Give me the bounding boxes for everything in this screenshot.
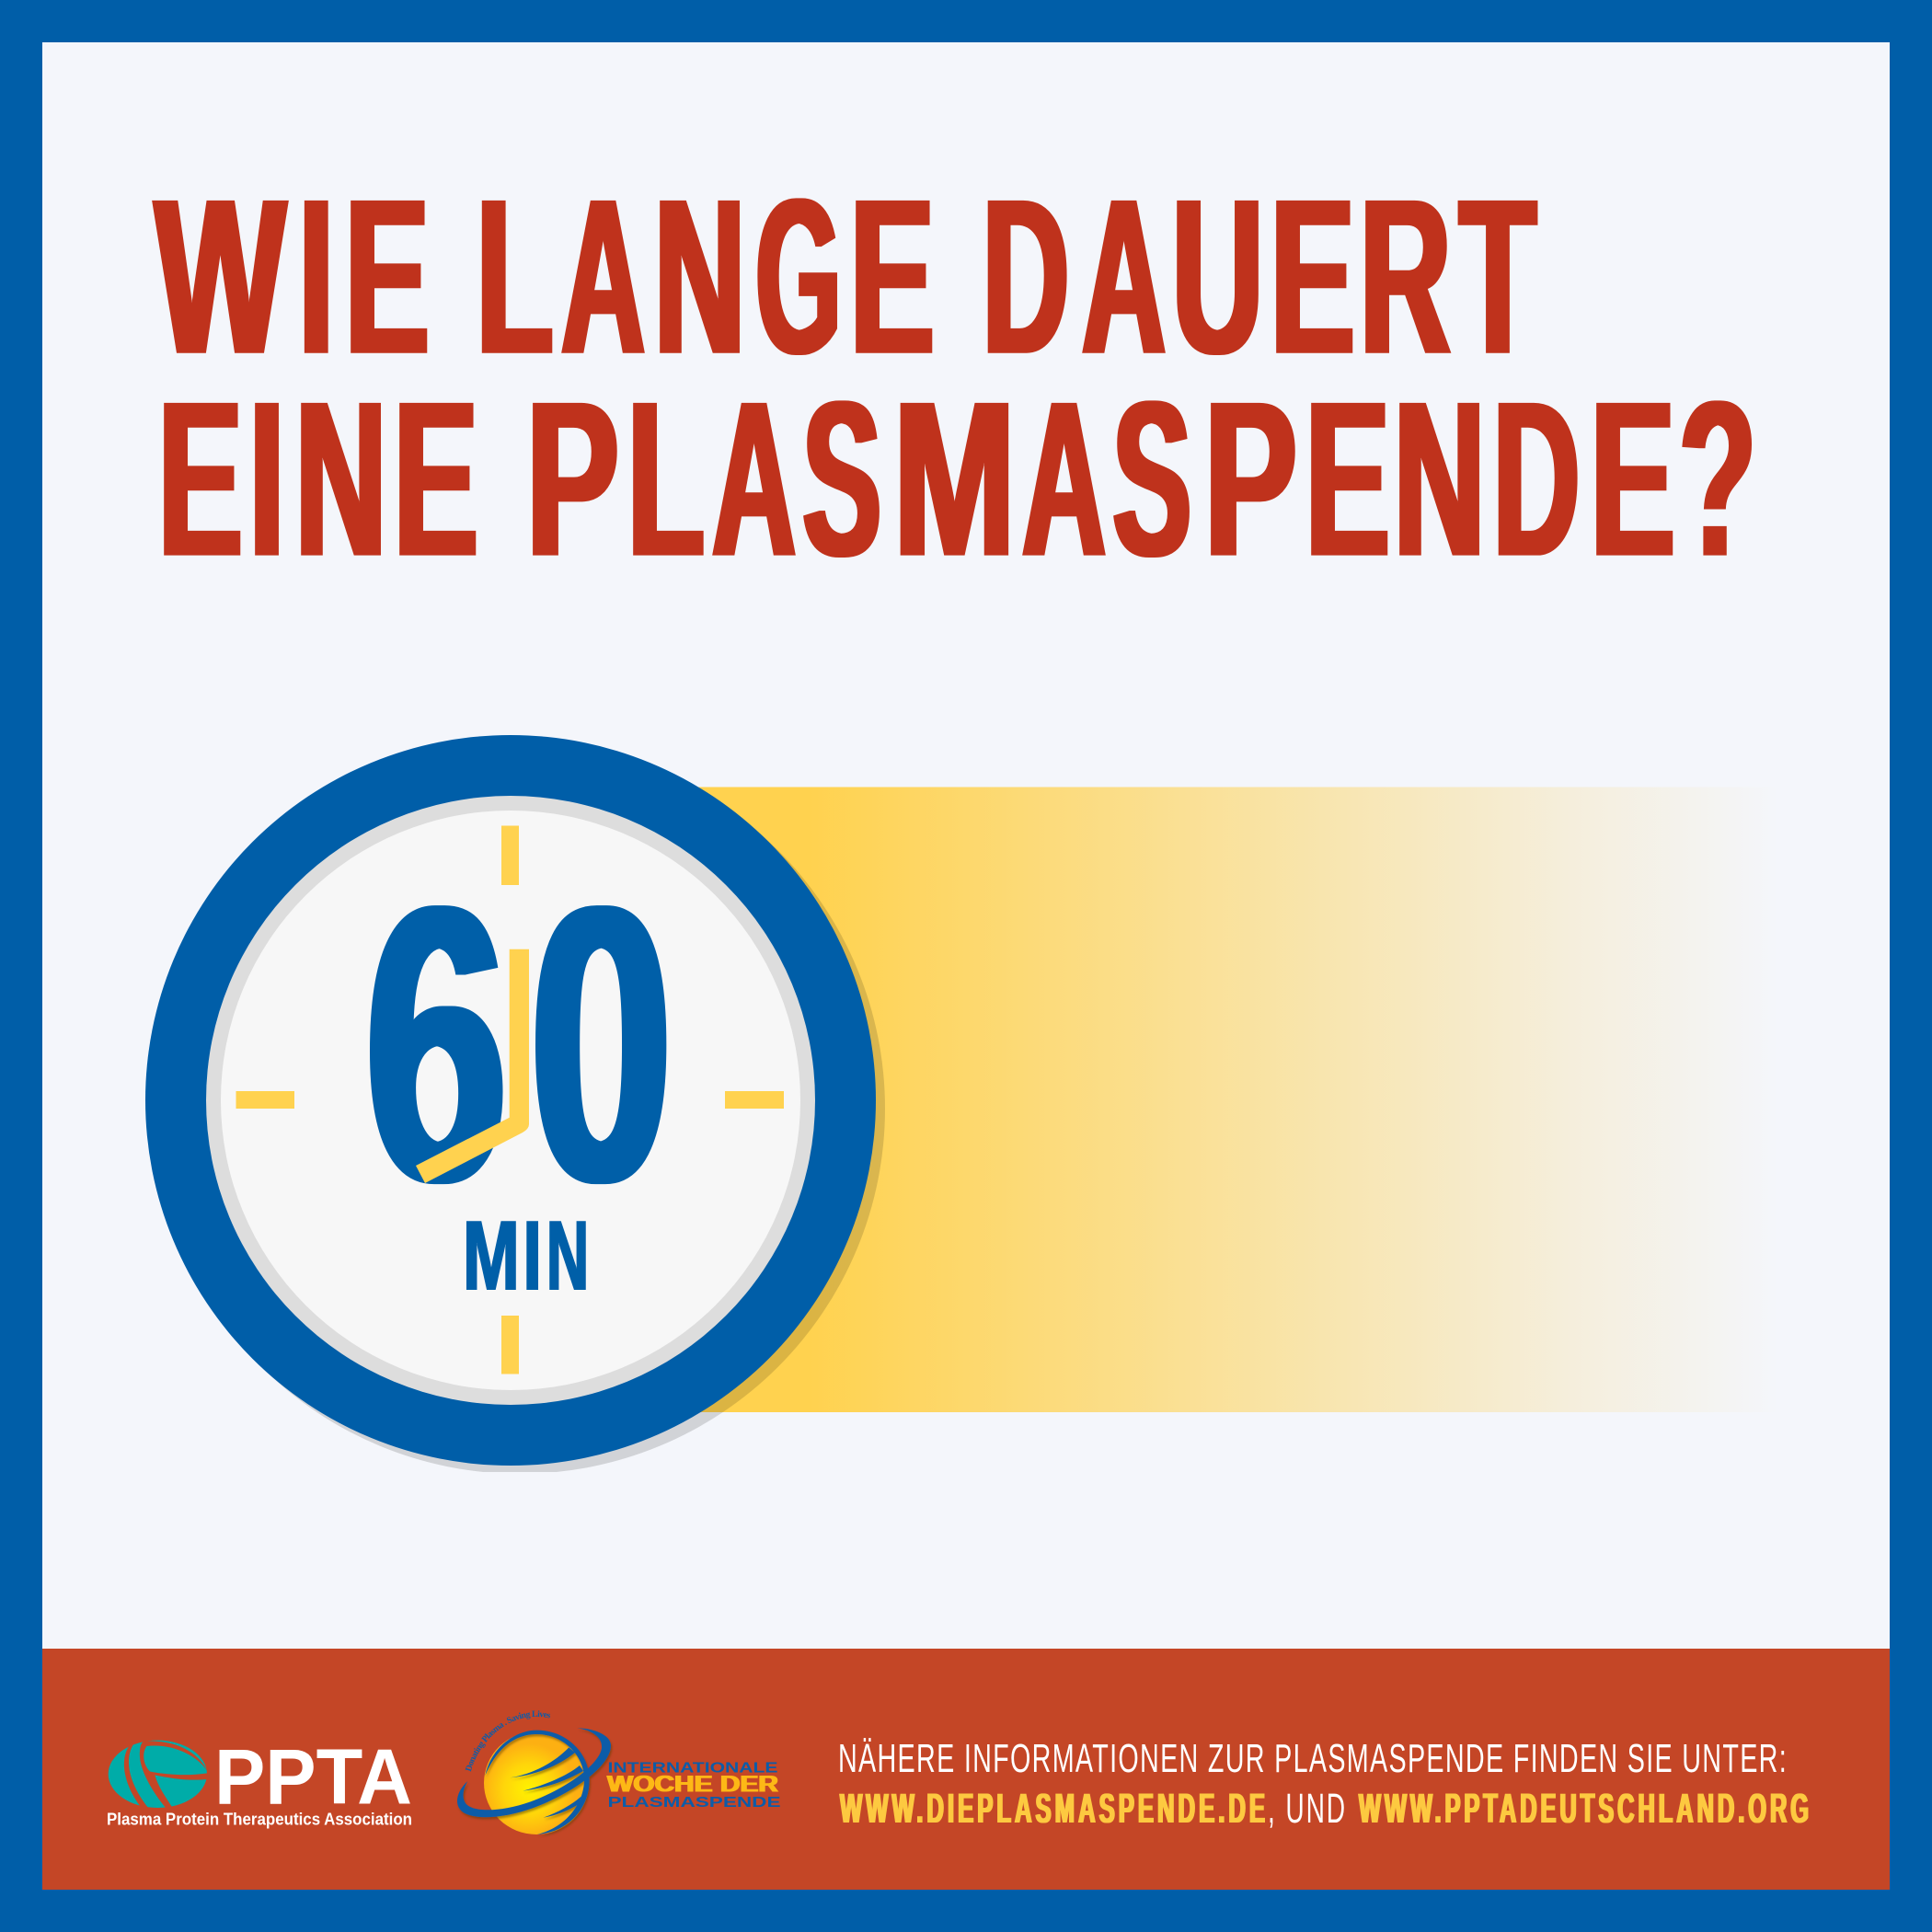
clock <box>145 735 885 1474</box>
number 60: 60 <box>365 824 673 1264</box>
website 1: WWW.DIEPLASMASPENDE.DE <box>840 1785 1269 1832</box>
PPTA globe icon <box>109 1741 207 1809</box>
clock grey ring <box>206 796 815 1405</box>
clock drop shadow <box>270 833 885 1472</box>
footer info text <box>838 1736 1812 1832</box>
title line 2: EINE PLASMASPENDE? <box>158 354 1756 603</box>
clock blue rim <box>145 735 876 1466</box>
hour ticks <box>236 826 784 1374</box>
logo text line 2: WOCHE DER <box>607 1771 778 1797</box>
logo text line 3: PLASMASPENDE <box>607 1795 780 1811</box>
footer band <box>42 1649 1890 1890</box>
sun globe <box>484 1731 589 1834</box>
clock hands <box>416 949 529 1183</box>
yellow fading motion band <box>644 788 1778 1412</box>
orbit swooshes <box>457 1728 611 1834</box>
connector text: , UND <box>1268 1785 1347 1832</box>
title line 1: WIE LANGE DAUERT <box>155 152 1536 400</box>
unit MIN: MIN <box>463 1200 589 1311</box>
PPTA logo <box>107 1734 412 1829</box>
International plasma week logo <box>456 1710 780 1836</box>
curved slogan: Donating Plasma . Saving Lives <box>466 1710 550 1772</box>
PPTA full name: Plasma Protein Therapeutics Association <box>107 1810 412 1829</box>
PPTA wordmark: PPTA <box>214 1734 412 1822</box>
logo text line 1: INTERNATIONALE <box>607 1761 778 1776</box>
title <box>155 152 1756 603</box>
clock face <box>221 811 800 1390</box>
